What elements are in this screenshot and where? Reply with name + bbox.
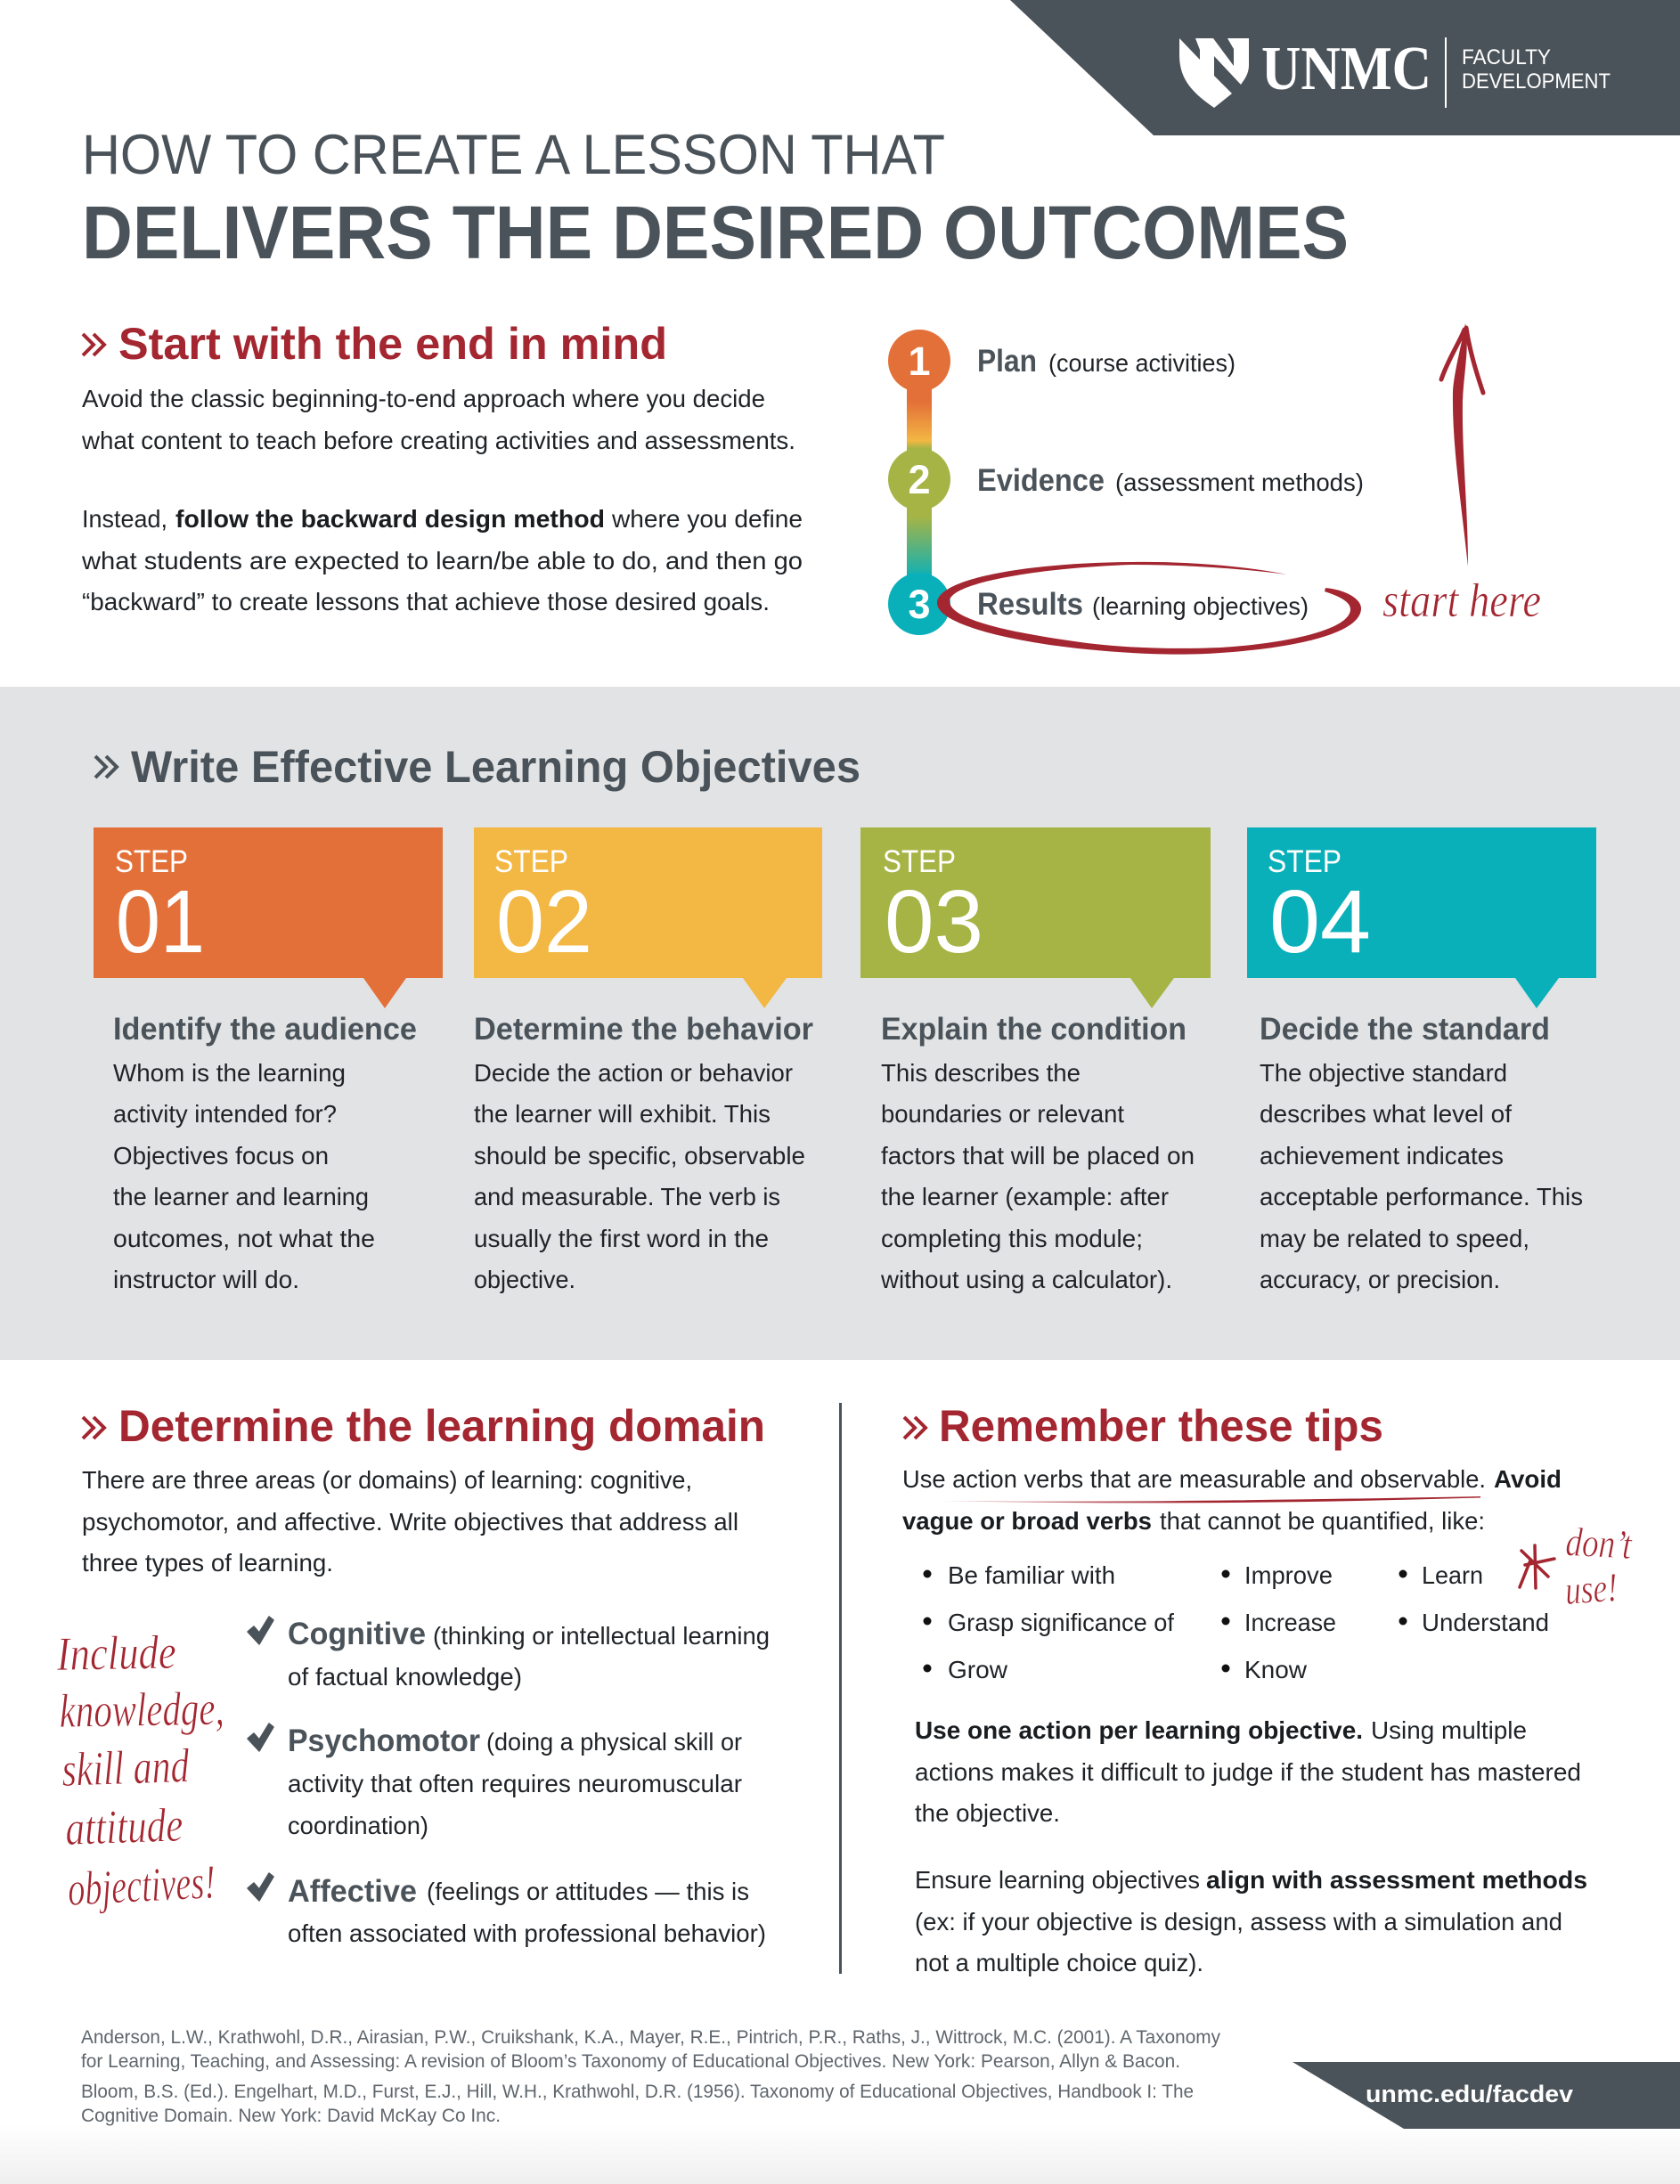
step 1 plan: 1: [908, 338, 931, 384]
step 3 results: [888, 573, 1309, 635]
text block: align with assessment: [915, 1866, 1587, 1976]
step 3 results: Results: [977, 587, 1083, 622]
step 02 card: [474, 827, 822, 1293]
handwritten note: include objectives: objectives!: [66, 1854, 216, 1916]
text block: intro paragraphs: follow the backward design method: [175, 505, 605, 533]
list: verbs to avoid: Grasp significance of: [948, 1609, 1174, 1636]
text block: intro paragraphs: “backward” to create lessons that achieve those desired goals.: [82, 588, 770, 615]
heading: start with the end in mind: Start with the end in mind: [118, 319, 667, 369]
title: HOW TO CREATE A LESSON THAT: [82, 124, 945, 186]
references: for Learning, Teaching, and Assessing: A revision of Bloom’s Taxonomy of Educational Objectives. New York: Pearson, Allyn & Bacon.: [81, 2051, 1180, 2072]
list item: affective: Affective: [288, 1874, 417, 1909]
list: verbs to avoid: Grow: [948, 1656, 1008, 1683]
handwritten note: don't use: [1563, 1519, 1634, 1613]
step 2 evidence: 2: [908, 457, 931, 502]
text block: domains intro: There are three areas (or domains) of learning: cognitive,: [82, 1466, 692, 1494]
step 02 text: Decide the action or behavior: [474, 1059, 793, 1087]
step 02 text: objective.: [474, 1266, 575, 1293]
footer banner: website: [1293, 2062, 1680, 2129]
text block: align with assessment: (ex: if your objective is design, assess with a simulation and: [915, 1908, 1562, 1935]
step 03 text: the learner (example: after: [881, 1183, 1169, 1210]
list: verbs to avoid: Increase: [1244, 1609, 1336, 1636]
references: Bloom, B.S. (Ed.). Engelhart, M.D., Furst, E.J., Hill, W.H., Krathwohl, D.R. (1956). Taxonomy of Educational Objectives, Handbook I: The: [81, 2082, 1194, 2102]
icon: asterisk: [1520, 1545, 1554, 1588]
list item: affective: (feelings or attitudes — this is: [427, 1878, 749, 1905]
handwritten note: include objectives: Include: [55, 1626, 176, 1681]
step 3 results: (learning objectives): [1092, 592, 1309, 620]
text block: domains intro: [82, 1466, 738, 1577]
step 01 text: Whom is the learning: [113, 1059, 346, 1087]
step 04 card: [1247, 827, 1596, 1293]
logo subtitle: DEVELOPMENT: [1462, 69, 1611, 94]
header banner with UNMC logo: [1010, 0, 1680, 135]
step 01 text: activity intended for?: [113, 1100, 337, 1128]
step 04 card: STEP: [1268, 844, 1342, 879]
title: DELIVERS THE DESIRED OUTCOMES: [82, 191, 1349, 274]
heading: remember these tips: Remember these tips: [939, 1401, 1383, 1451]
references: Anderson, L.W., Krathwohl, D.R., Airasian, P.W., Cruikshank, K.A., Mayer, R.E., Pintrich, P.R., Raths, J., Wittrock, M.C. (2001). A Taxonomy: [81, 2027, 1220, 2048]
text block: action verbs: vague or broad verbs: [902, 1507, 1152, 1535]
hand-drawn circle around results: [937, 562, 1361, 655]
list: verbs to avoid: Understand: [1422, 1609, 1549, 1636]
step 01 card: STEP: [115, 844, 188, 879]
text block: one action: [915, 1716, 1581, 1827]
text block: action verbs: [902, 1465, 1562, 1535]
list item: psychomotor: activity that often requires neuromuscular: [288, 1770, 742, 1797]
text block: intro paragraphs: Instead,: [82, 505, 167, 533]
text block: action verbs: that cannot be quantified, like:: [1160, 1507, 1485, 1535]
list item: psychomotor: (doing a physical skill or: [486, 1728, 742, 1756]
text block: intro paragraphs: [81, 385, 803, 615]
step 03 card: Explain the condition: [881, 1012, 1187, 1047]
logo subtitle: [1462, 45, 1611, 94]
logo subtitle: FACULTY: [1462, 45, 1551, 69]
step 04 text: may be related to speed,: [1260, 1225, 1529, 1252]
step 04 text: The objective standard: [1260, 1059, 1507, 1087]
step 02 card: STEP: [494, 844, 568, 879]
list item: cognitive: [248, 1617, 770, 1691]
step 04 text: [1260, 1059, 1583, 1293]
list item: cognitive: of factual knowledge): [288, 1663, 522, 1691]
step 2 evidence: [888, 448, 1364, 510]
step 04 text: acceptable performance. This: [1260, 1183, 1583, 1210]
text block: action verbs: Avoid: [1494, 1465, 1562, 1493]
handwritten note: don't use: don’t: [1564, 1519, 1634, 1568]
step 03 card: STEP: [883, 844, 956, 879]
step 03 text: completing this module;: [881, 1225, 1143, 1252]
panel: determine the learning domain: [55, 1401, 770, 1947]
step 01 text: the learner and learning: [113, 1183, 369, 1210]
icon: UNMC shield: [1179, 38, 1249, 108]
text block: align with assessment: align with assessment methods: [1206, 1866, 1587, 1894]
heading: determine the learning domain: Determine the learning domain: [118, 1401, 765, 1451]
step 02 text: and measurable. The verb is: [474, 1183, 780, 1210]
list item: cognitive: (thinking or intellectual learning: [433, 1622, 770, 1650]
step 02 text: [474, 1059, 805, 1293]
list: verbs to avoid: [923, 1561, 1549, 1683]
handwritten note: include objectives: attitude: [64, 1797, 183, 1855]
step 03 text: [880, 1059, 1195, 1293]
step 02 card: 02: [496, 872, 592, 972]
step 02 text: usually the first word in the: [474, 1225, 769, 1252]
text block: intro paragraphs: what students are expected to learn/be able to do, and then go: [81, 547, 803, 575]
hand-drawn underline: [941, 1496, 1480, 1503]
text block: one action: actions makes it difficult to judge if the student has mastered: [915, 1758, 1581, 1786]
text block: domains intro: psychomotor, and affective. Write objectives that address all: [82, 1508, 738, 1536]
handwritten note: include objectives: skill and: [61, 1739, 191, 1797]
step 1 plan: Plan: [977, 344, 1037, 379]
list item: affective: often associated with professional behavior): [288, 1919, 766, 1947]
step 04 card: Decide the standard: [1260, 1012, 1550, 1047]
step 04 text: accuracy, or precision.: [1260, 1266, 1500, 1293]
text block: action verbs: Use action verbs that are measurable and observable.: [902, 1465, 1486, 1493]
references: Cognitive Domain. New York: David McKay Co Inc.: [81, 2106, 501, 2126]
text block: one action: the objective.: [915, 1799, 1060, 1827]
heading: write effective learning objectives: Write Effective Learning Objectives: [131, 742, 860, 792]
list: verbs to avoid: Learn: [1422, 1561, 1483, 1589]
step 04 card: 04: [1269, 872, 1371, 972]
step 2 evidence: Evidence: [977, 463, 1105, 498]
text block: align with assessment: not a multiple choice quiz).: [915, 1949, 1203, 1976]
list item: affective: [248, 1873, 766, 1947]
text block: intro paragraphs: Avoid the classic beginning-to-end approach where you decide: [82, 385, 765, 412]
step 01 card: Identify the audience: [113, 1012, 417, 1047]
list item: psychomotor: [248, 1724, 742, 1839]
logo wordmark: UNMC: [1261, 35, 1431, 103]
panel: write effective learning objectives: [0, 687, 1680, 1360]
step 03 text: This describes the: [881, 1059, 1081, 1087]
step 2 evidence: (assessment methods): [1115, 469, 1364, 496]
step 02 text: should be specific, observable: [474, 1142, 805, 1169]
step 1 plan: (course activities): [1048, 349, 1236, 377]
list: verbs to avoid: Improve: [1244, 1561, 1333, 1589]
text block: intro paragraphs: what content to teach before creating activities and assessments.: [81, 427, 795, 454]
list item: psychomotor: coordination): [288, 1812, 428, 1839]
step 02 text: the learner will exhibit. This: [474, 1100, 771, 1128]
list item: cognitive: Cognitive: [288, 1617, 426, 1651]
step 03 text: boundaries or relevant: [881, 1100, 1124, 1128]
step 04 text: describes what level of: [1260, 1100, 1512, 1128]
step 01 text: [113, 1059, 375, 1293]
handwritten note: include objectives: knowledge,: [59, 1682, 224, 1738]
handwritten note: start here: start here: [1382, 574, 1541, 627]
step 01 card: [94, 827, 443, 1293]
panel: start with the end in mind: [81, 319, 803, 615]
panel: remember these tips: [902, 1401, 1634, 1976]
text block: one action: Use one action per learning objective.: [915, 1716, 1363, 1744]
step 1 plan: [888, 330, 1236, 392]
list item: psychomotor: Psychomotor: [288, 1724, 480, 1758]
connector: [907, 361, 932, 604]
text block: one action: Using multiple: [1371, 1716, 1527, 1744]
step 01 text: outcomes, not what the: [113, 1225, 375, 1252]
list: verbs to avoid: Know: [1244, 1656, 1308, 1683]
text block: intro paragraphs: where you define: [611, 505, 803, 533]
step 02 card: Determine the behavior: [474, 1012, 813, 1047]
list: verbs to avoid: Be familiar with: [948, 1561, 1115, 1589]
diagram: backward design steps: [888, 323, 1541, 655]
step 04 text: achievement indicates: [1260, 1142, 1504, 1169]
references: [81, 2027, 1220, 2126]
step 01 text: instructor will do.: [113, 1266, 299, 1293]
text block: domains intro: three types of learning.: [82, 1549, 333, 1577]
step 03 card: [860, 827, 1211, 1293]
text block: align with assessment: Ensure learning objectives: [915, 1866, 1200, 1894]
step 03 text: without using a calculator).: [880, 1266, 1172, 1293]
step 01 card: 01: [116, 872, 205, 972]
title: [82, 124, 1349, 274]
step 3 results: 3: [908, 582, 931, 627]
step 01 text: Objectives focus on: [113, 1142, 329, 1169]
step 03 card: 03: [885, 872, 983, 972]
handwritten note: include objectives: [55, 1626, 224, 1916]
footer banner: website: unmc.edu/facdev: [1366, 2081, 1573, 2107]
step 03 text: factors that will be placed on: [881, 1142, 1195, 1169]
arrow: upward: [1441, 323, 1483, 566]
handwritten note: don't use: use!: [1563, 1564, 1619, 1613]
